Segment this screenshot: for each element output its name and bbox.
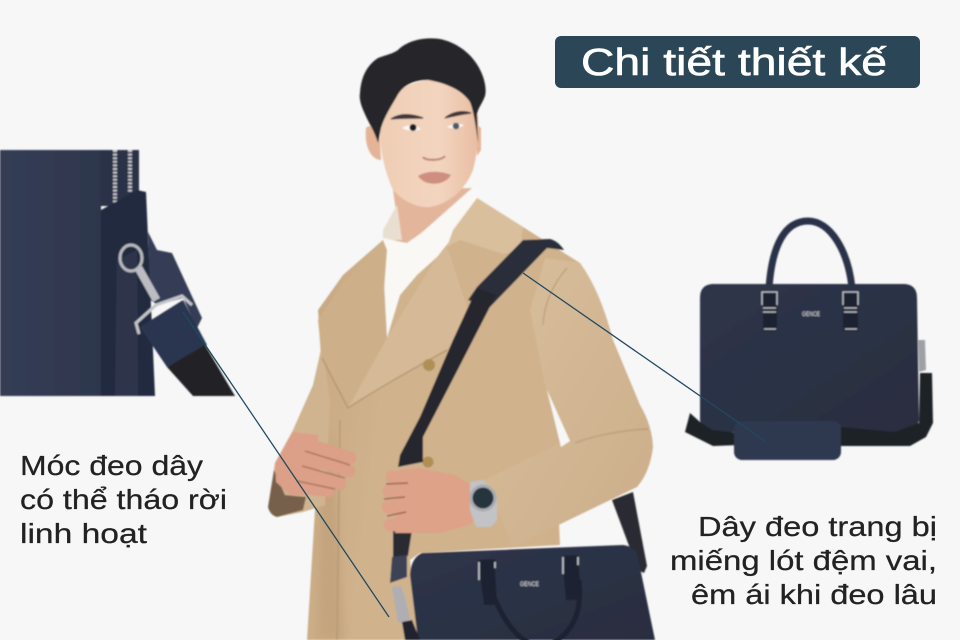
swivel hook: [392, 586, 410, 624]
left lapel: [318, 240, 387, 408]
placket line: [337, 420, 340, 640]
shoulder strap: [398, 288, 496, 467]
bag logo: GENCE: [520, 581, 540, 588]
coat button top: [423, 359, 435, 371]
coat button lower: [422, 456, 434, 468]
nose: [423, 156, 445, 160]
strap keeper: [390, 555, 407, 583]
white turtleneck: [383, 187, 477, 338]
lapel outline: [322, 350, 447, 408]
carried bag: [402, 545, 655, 640]
right eyebrow: [445, 112, 471, 118]
left sleeve: [268, 345, 330, 517]
hook right: [918, 340, 926, 372]
right handle tab: [562, 555, 580, 600]
ear left: [366, 126, 381, 160]
right collar: [447, 198, 523, 254]
zipper teeth: [115, 150, 130, 203]
right tab: [843, 291, 858, 331]
strap right: [840, 373, 933, 446]
man in trench coat: [268, 38, 655, 640]
swivel hook: [135, 266, 160, 302]
shoulder strap pad: [468, 239, 564, 307]
right buckle: [843, 292, 858, 329]
strap leather tab: [140, 300, 207, 367]
text: detachable hook: Móc đeo dây: [20, 450, 203, 481]
finger gaps: [297, 451, 350, 489]
text: detachable hook: có thể tháo rời: [20, 484, 227, 515]
ear right: [477, 125, 481, 156]
left tab: [763, 291, 777, 331]
lips: [418, 172, 451, 184]
text: detachable hook: [20, 450, 227, 549]
shoulder seam: [543, 268, 567, 325]
back of collar: [383, 205, 402, 240]
bag side strap end: [402, 620, 420, 640]
black webbing strap: [167, 345, 235, 396]
side gusset: [101, 190, 155, 396]
left hand: [275, 432, 350, 495]
left inset: detail of detachable strap hook: [0, 150, 235, 396]
left handle tab: [478, 559, 497, 605]
right tab silver buckle: [563, 557, 578, 574]
case logo: GENCE: [802, 312, 820, 318]
face: [380, 80, 478, 207]
leather band: [115, 250, 138, 396]
text: detachable hook: linh hoạt: [20, 518, 147, 549]
title badge: [555, 36, 920, 88]
right eye: [447, 124, 464, 129]
hair: [360, 38, 486, 143]
text: shoulder pad strap: Dây đeo trang bị: [698, 511, 937, 542]
right sleeve: [485, 258, 653, 547]
left tab silver buckle: [479, 562, 495, 580]
wrist watch: [470, 480, 497, 527]
left cuff lining: [268, 470, 306, 517]
text: shoulder pad strap: êm ái khi đeo lâu: [691, 579, 937, 610]
text: shoulder pad strap: miếng lót đệm vai,: [670, 545, 937, 576]
text: shoulder pad strap: [670, 511, 937, 610]
left eyebrow: [391, 115, 423, 119]
left buckle: [762, 292, 777, 329]
finger gaps: [384, 483, 408, 516]
ring: [120, 245, 142, 271]
fingers left hand: [295, 443, 350, 491]
strap below hand: [393, 530, 412, 558]
strap behind right arm: [612, 492, 647, 573]
bag handle: [484, 572, 580, 640]
back strap pad: [148, 232, 202, 328]
main bag side: [0, 150, 101, 396]
strap left: [685, 413, 740, 446]
right product: briefcase: [685, 221, 933, 460]
right hand: [384, 468, 480, 533]
coat shading: [318, 430, 345, 640]
gap between arm and body: [547, 390, 570, 447]
shoulder pad: [734, 421, 841, 460]
callout line: strap hook: [183, 312, 389, 617]
callout line: shoulder pad: [523, 273, 765, 441]
carry handle: [769, 221, 852, 288]
case body: [700, 284, 919, 432]
coat front right lapel: [348, 247, 467, 408]
fingers right hand: [388, 477, 425, 525]
zip strip: [101, 150, 139, 206]
coat body: [307, 198, 600, 640]
left eye: [402, 125, 421, 131]
hook bar: [136, 296, 192, 334]
sleeve crease: [575, 429, 648, 443]
neck: [393, 188, 472, 243]
title: Chi tiết thiết kế: [581, 42, 887, 84]
